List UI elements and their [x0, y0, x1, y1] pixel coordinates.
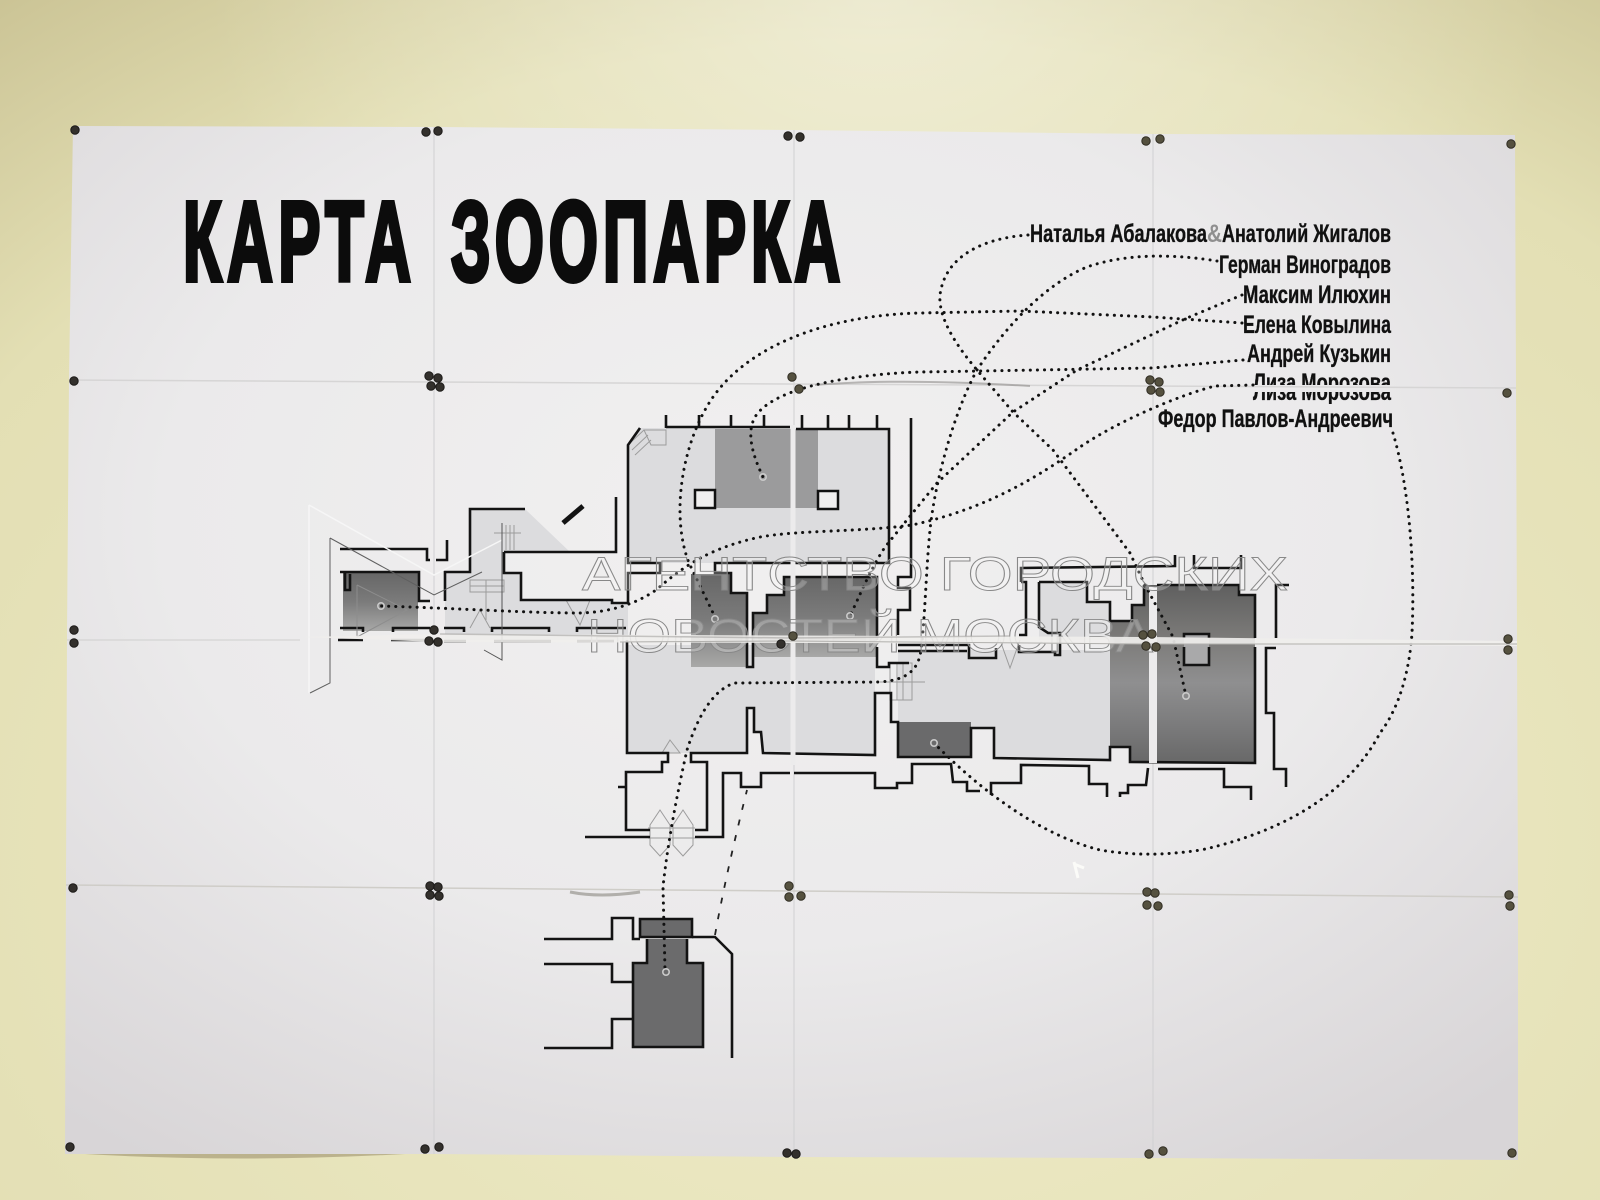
- title: ЗООПАРКА: [451, 179, 840, 305]
- plan: light room fills: [445, 428, 1110, 760]
- route end markers: [378, 474, 1189, 975]
- name: Андрей Кузькин: Андрей Кузькин: [1247, 340, 1391, 368]
- dotted route: Наталья Абалакова & Анатолий Жигалов: [940, 235, 1186, 696]
- dotted route: Андрей Кузькин: [751, 360, 1243, 477]
- dashed route: [715, 790, 747, 935]
- watermark logo: [309, 505, 502, 693]
- plan: thin drawing lines: [470, 430, 1020, 856]
- name: Лиза Морозова, split by fold: Лиза Морозова: [1253, 369, 1392, 397]
- pins: left half: [66, 126, 804, 1158]
- name: Герман Виноградов: Герман Виноградов: [1219, 251, 1391, 279]
- dotted route: Федор Павлов-Андреевич: [934, 433, 1413, 854]
- watermark text: НОВОСТЕЙ МОСКВА: [587, 609, 1154, 662]
- title: [183, 179, 840, 305]
- watermark text: [582, 547, 1288, 662]
- plan: walls: [338, 415, 1289, 1058]
- pins: right half: [785, 135, 1516, 1158]
- dotted route: Герман Виноградов: [663, 256, 1217, 970]
- floor plan: [338, 415, 1289, 1058]
- name: Елена Ковылина: Елена Ковылина: [1243, 311, 1392, 339]
- dotted route: Елена Ковылина: [680, 311, 1242, 617]
- title: КАРТА: [183, 179, 411, 305]
- plan: dark rooms: [343, 429, 1255, 763]
- poster sheet: [65, 126, 1518, 1160]
- horizontal crease: [67, 634, 1517, 646]
- plan: vertical fold gaps: [790, 425, 1157, 765]
- name: Абалакова & Жигалов: &: [1207, 220, 1222, 248]
- plan: small white squares: [695, 490, 838, 509]
- push pins: [66, 126, 1516, 1158]
- dotted route: Лиза Морозова: [381, 385, 1253, 613]
- name: Абалакова & Жигалов: [1030, 220, 1391, 248]
- name: Максим Илюхин: Максим Илюхин: [1243, 281, 1391, 309]
- name: Лиза Морозова, split by fold: Лиза Морозова: [1253, 378, 1392, 406]
- watermark text: АГЕНТСТВО ГОРОДСКИХ: [582, 547, 1288, 600]
- dotted route: Максим Илюхин: [850, 295, 1242, 616]
- name: Федор Павлов-Андреевич: Федор Павлов-Андреевич: [1158, 405, 1393, 433]
- names list: [1030, 220, 1393, 433]
- name: Лиза Морозова, split by fold: [1252, 373, 1392, 404]
- name: Абалакова & Жигалов: Анатолий Жигалов: [1222, 220, 1391, 248]
- paper scrap: [1074, 862, 1084, 878]
- name: Абалакова & Жигалов: Наталья Абалакова: [1030, 220, 1208, 248]
